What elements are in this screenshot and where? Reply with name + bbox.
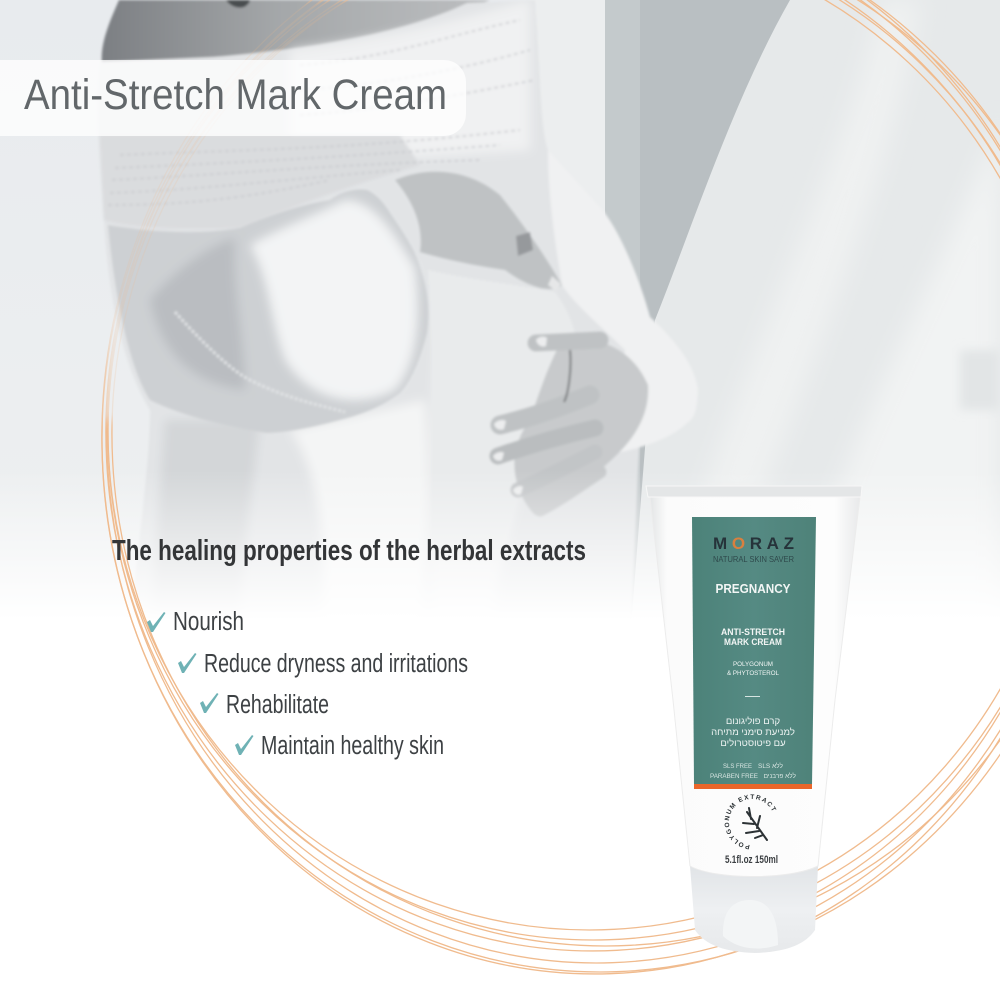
curtain (630, 0, 1000, 640)
polygonum extract badge: POLYGONUM EXTRACT (724, 794, 776, 850)
free-from claims: SLS FREE (723, 763, 753, 770)
brand logo (713, 534, 794, 564)
benefit: Reduce dryness and irritations: Reduce dryness and irritations (204, 650, 468, 678)
smocking texture (108, 20, 535, 205)
tube cap (690, 866, 818, 953)
benefit: Nourish (147, 608, 244, 636)
bodice highlight (290, 0, 530, 165)
title banner (0, 60, 466, 136)
benefit: Maintain healthy skin (235, 732, 444, 760)
teal label (692, 517, 816, 785)
free-from claims: PARABEN FREE (710, 773, 759, 780)
dress base (98, 0, 650, 640)
volume text: 5.1fl.oz 150ml (725, 854, 778, 866)
tube body (650, 497, 860, 876)
orange stripe (694, 784, 812, 789)
heading: healing properties: The healing properties of the herbal extracts (112, 535, 586, 567)
lower hand (493, 335, 648, 515)
benefit: Rehabilitate (200, 691, 329, 719)
benefit: Rehabilitate: Rehabilitate (226, 691, 329, 719)
benefit: Nourish: Nourish (173, 608, 244, 636)
brand logo: M O RAZ (713, 534, 794, 553)
label Hebrew copy: קרם פוליגונום (726, 715, 780, 727)
label English copy: PREGNANCY (716, 582, 791, 596)
arm sleeve (108, 189, 428, 433)
label Hebrew copy: עם פיטוסטרולים (720, 737, 786, 749)
label Hebrew copy: למניעת סימני מתיחה (711, 726, 795, 738)
title text: Anti-Stretch Mark Cream (24, 71, 447, 119)
woman figure (98, 0, 698, 640)
lower dress folds (150, 300, 560, 640)
label English copy: ANTI-STRETCH (721, 627, 785, 637)
free-from claims: ללא פרבנים (764, 772, 797, 780)
label Hebrew copy (711, 715, 795, 749)
skin (102, 0, 490, 64)
benefit: Maintain healthy skin: Maintain healthy skin (261, 732, 444, 760)
product tube (646, 486, 862, 953)
tube crimp (646, 486, 862, 497)
label English copy: POLYGONUM (733, 661, 773, 668)
right sleeve (548, 150, 698, 454)
label English copy: MARK CREAM (724, 637, 782, 647)
free-from claims (710, 762, 797, 780)
label English copy: & PHYTOSTEROL (727, 670, 779, 677)
free-from claims: ללא SLS (758, 762, 784, 770)
label English copy (716, 582, 791, 677)
belly panel (428, 270, 577, 560)
upper hand with ring (395, 172, 562, 291)
benefits list (147, 608, 468, 760)
fade of the photo to white (0, 470, 1000, 620)
brand logo: NATURAL SKIN SAVER (713, 555, 794, 564)
